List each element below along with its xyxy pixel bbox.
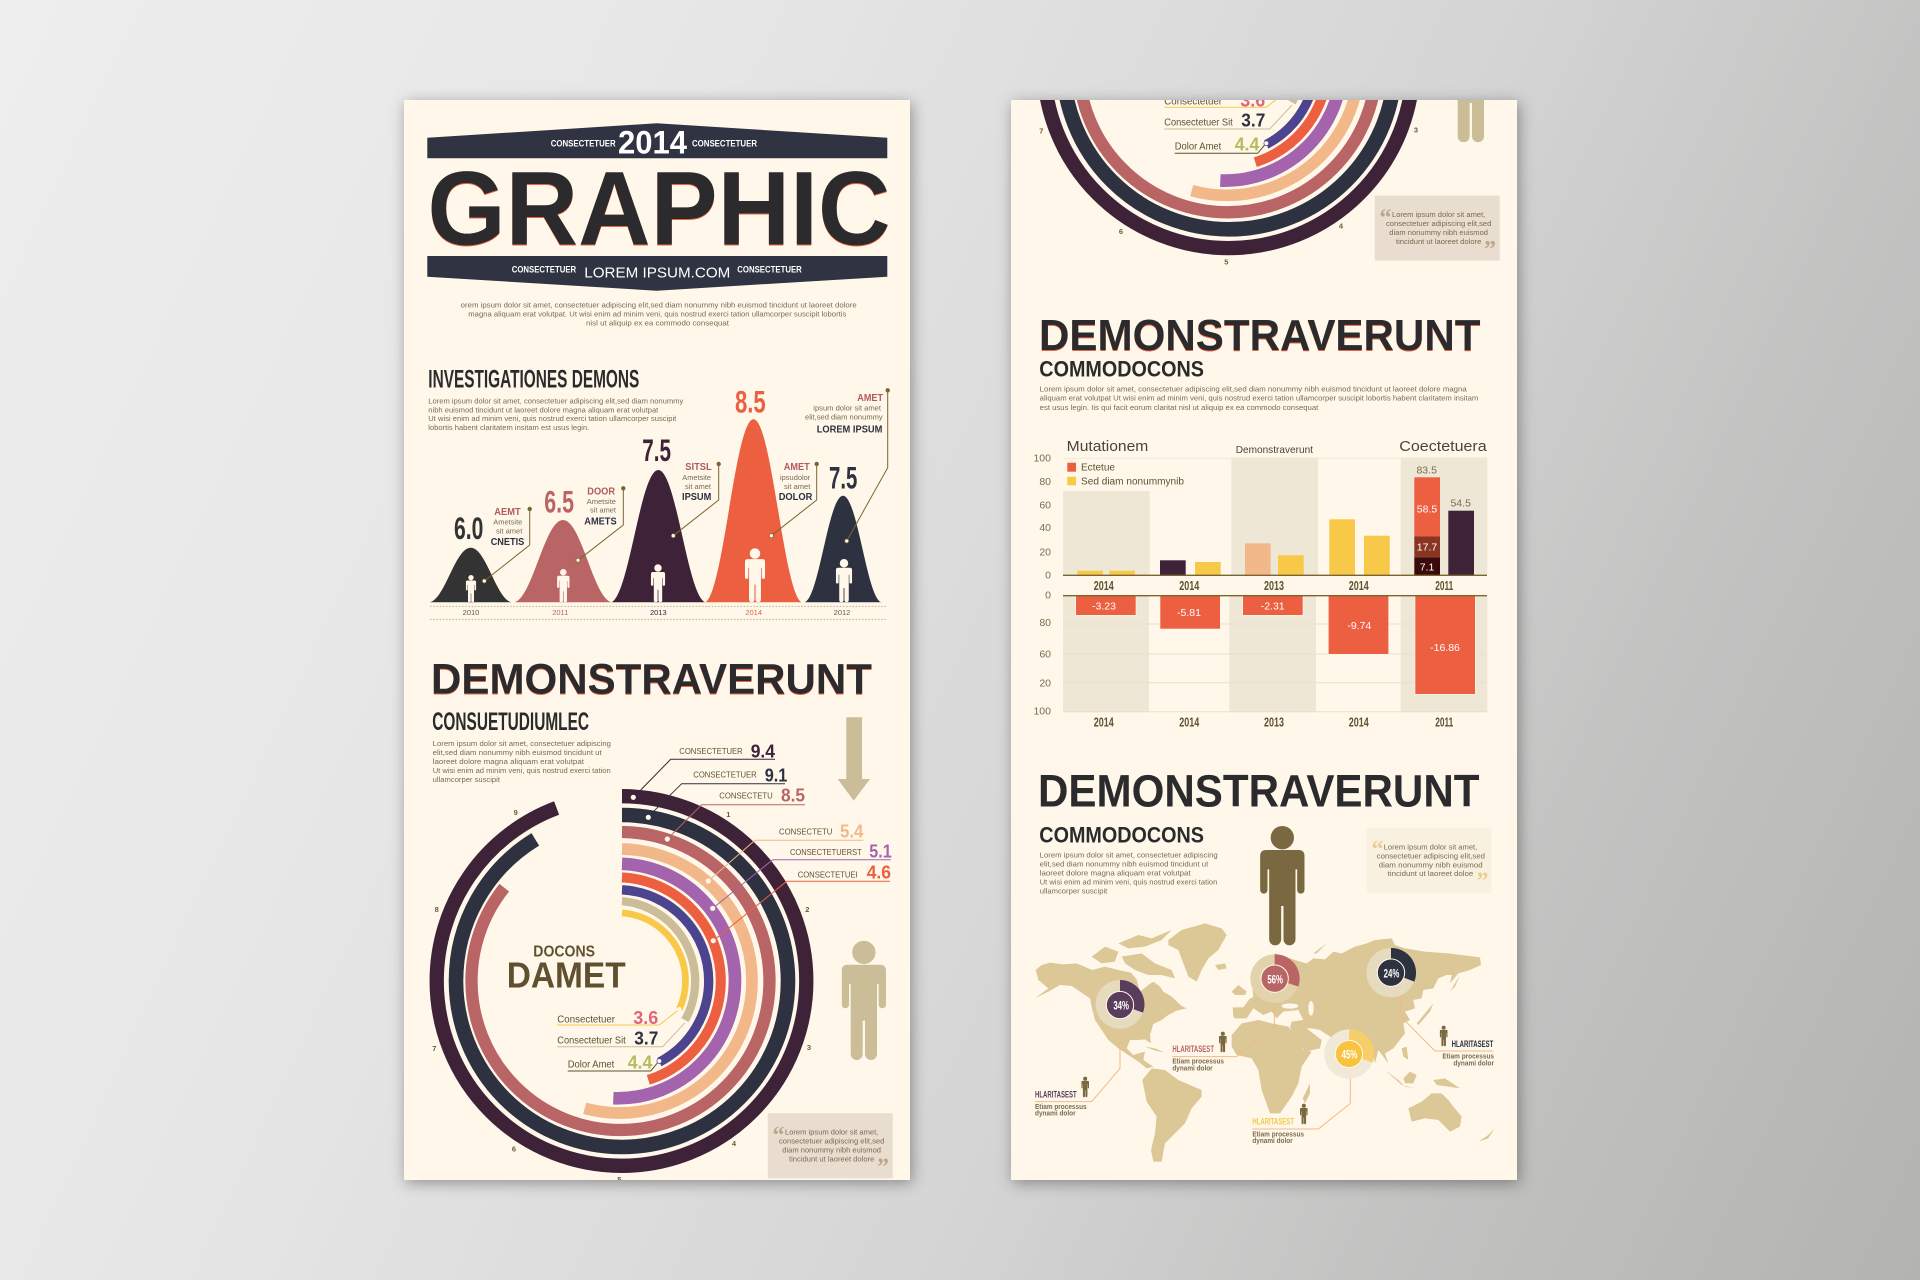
- callout: DOOR: [576, 485, 626, 562]
- title banner: top ribbon: CONSECTETUER: [551, 139, 616, 149]
- intro text: [461, 300, 857, 328]
- ring label 3.7: [557, 1023, 685, 1048]
- donut: 34%: [1096, 980, 1144, 1029]
- text block: Consuetudiumlec: laoreet dolore magna aliquam erat volutpat: [433, 757, 585, 766]
- continued quote box: [1375, 196, 1500, 263]
- upper years: 2014: [1179, 578, 1200, 593]
- lower bands: [1063, 596, 1487, 712]
- callout: AMET lorem ipsum: AMET: [857, 392, 884, 404]
- text block: Investigationes: Ut wisi enim ad minim veni, quis nostrud exerci tation ullamcorper suscipit: [428, 414, 677, 423]
- upper bars: [1077, 477, 1474, 575]
- text block: map section: Ut wisi enim ad minim veni, quis nostrud exerci tation: [1040, 878, 1217, 887]
- y axis lower: 100: [1033, 705, 1051, 717]
- infographic canvas: [404, 100, 1517, 1180]
- lower years: 2013: [1264, 715, 1284, 730]
- quote box: “: [772, 1123, 784, 1149]
- ring scale numbers: 5: [617, 1175, 621, 1184]
- continued ring label 3.6: Consectetuer: [1164, 96, 1222, 108]
- upper years: 2011: [1435, 578, 1453, 593]
- upper bar values: 7.1: [1420, 562, 1434, 574]
- map callout: Europe: HLARITASEST: [1172, 1044, 1214, 1054]
- ring 4.4: [622, 890, 709, 1062]
- ring 4.6: [622, 877, 721, 1080]
- map callout: India: [1252, 1078, 1350, 1145]
- lower bar values: -2.31: [1261, 600, 1285, 612]
- eurasia: [1233, 938, 1481, 1063]
- y axis upper: [1033, 453, 1051, 582]
- chart band backgrounds: [1063, 457, 1487, 575]
- upper bar values: 17.7: [1417, 542, 1437, 554]
- lower years: 2011: [1435, 715, 1453, 730]
- upper bar values: [1416, 464, 1471, 574]
- intro text: magna aliquam erat volutpat. Ut wisi enim ad minim veni, quis nostrud exerci tation ullamcorper suscipit lobortis: [468, 310, 846, 319]
- year axis: 2012: [834, 608, 850, 617]
- continued quote box: diam nonummy nibh euismod: [1389, 228, 1488, 237]
- bell 2010: 6.0: [454, 510, 483, 546]
- bell 2010: [430, 510, 512, 602]
- map callout: Russia: HLARITASEST: [1452, 1039, 1494, 1049]
- upper years: 2014: [1349, 578, 1369, 593]
- continued tan person: [1449, 23, 1493, 142]
- ring scale numbers: 4: [732, 1139, 737, 1148]
- y axis lower: [1033, 590, 1051, 717]
- upper years: 2014: [1094, 578, 1114, 593]
- ring label 5.4: [706, 821, 863, 884]
- icon: down arrow: [838, 717, 870, 801]
- ring label 3.6: 3.6: [633, 1008, 658, 1028]
- text block: Consuetudiumlec: ullamcorper suscipit: [433, 775, 501, 784]
- heading: Demonstraverunt map section: DEMONSTRAVERUNT: [1038, 766, 1480, 817]
- donut: 45%: [1324, 1029, 1374, 1079]
- lower years: 2014: [1094, 715, 1114, 730]
- panel: left page: [404, 100, 910, 1184]
- continued ring label 4.4: 4.4: [1235, 135, 1259, 155]
- callout: SITSL: [671, 461, 721, 538]
- quote box: consectetuer adipiscing elit,sed: [779, 1137, 884, 1146]
- callout: AMET ipsudolor: ipsudolor: [780, 473, 811, 482]
- subheading: Consuetudiumlec: CONSUETUDIUMLEC: [432, 708, 589, 736]
- right page shadow: [1011, 100, 1517, 1180]
- bell 2014: [706, 383, 802, 602]
- callout: DOOR: sit amet: [590, 506, 617, 515]
- map callout: Russia: Etiam processus: [1442, 1054, 1494, 1061]
- intro text: nisl ut aliquip ex ea commodo consequat: [586, 319, 730, 328]
- legend: [1067, 463, 1184, 487]
- column titles: Demonstraverunt: [1236, 444, 1313, 456]
- callout: AEMT: [482, 506, 532, 583]
- column titles: Coectetuera: [1399, 438, 1487, 455]
- upper bar values: 54.5: [1450, 498, 1471, 510]
- callout: DOOR: DOOR: [587, 485, 615, 497]
- ring label 5.4: 5.4: [840, 821, 863, 841]
- ring label 5.1: CONSECTETUERST: [790, 847, 862, 857]
- cuba and caribbean: [1145, 1047, 1165, 1053]
- ring 9.1: [456, 815, 788, 1147]
- callout: AMET ipsudolor: sit amet: [784, 482, 811, 491]
- continued ring scale numbers: 6: [1119, 227, 1123, 236]
- subheading: Commodocons map section: COMMODOCONS: [1039, 822, 1204, 847]
- ring label 9.1: CONSECTETUER: [693, 769, 757, 779]
- callout: DOOR: Ametsite: [587, 497, 616, 506]
- title banner: top ribbon: CONSECTETUER: [692, 139, 757, 149]
- ring 3.6: [622, 913, 686, 1009]
- donut: 24%: 24%: [1384, 966, 1400, 980]
- ring label 5.1: 5.1: [869, 841, 892, 861]
- quote box: map section: tincidunt ut laoreet doloe: [1388, 869, 1473, 878]
- quote box: Lorem ipsum dolor sit amet,: [785, 1128, 878, 1137]
- quote box: map section: “: [1372, 837, 1384, 863]
- greenland: [1168, 923, 1227, 982]
- donut: 56%: [1250, 954, 1300, 1003]
- y axis lower: 0: [1045, 590, 1051, 602]
- donut: 56%: 56%: [1267, 972, 1283, 986]
- icon: brown person: [1260, 826, 1304, 945]
- continued quote box: ”: [1484, 237, 1496, 263]
- ring label 9.4: CONSECTETUER: [679, 746, 743, 756]
- ring scale numbers: 3: [807, 1043, 811, 1052]
- lower years: 2014: [1179, 715, 1200, 730]
- title banner: top ribbon: 2014: [618, 124, 687, 160]
- continued quote box: Lorem ipsum dolor sit amet,: [1392, 210, 1485, 219]
- lower bar values: -9.74: [1347, 620, 1371, 632]
- page shadows: [404, 100, 910, 1180]
- ring label 3.6: Consectetuer: [557, 1013, 615, 1025]
- text block: Consuetudiumlec: Lorem ipsum dolor sit amet, consectetuer adipiscing: [433, 739, 611, 748]
- callout: AEMT: Ametsite: [493, 517, 522, 526]
- text block: map section: ullamcorper suscipit: [1040, 887, 1108, 896]
- upper bar values: 58.5: [1417, 504, 1437, 516]
- bell 2011: 6.5: [544, 483, 574, 519]
- ring label 8.5: CONSECTETU: [719, 790, 773, 800]
- quote box: [768, 1113, 893, 1180]
- title banner: bottom ribbon: LOREM IPSUM.COM: [584, 265, 730, 282]
- heading: Demonstraverunt chart section: DEMONSTRAVERUNT: [1039, 312, 1481, 360]
- ring label 8.5: [665, 785, 805, 842]
- ring 5.1: [613, 864, 735, 1098]
- title banner: bottom ribbon: [427, 256, 887, 291]
- ring label 4.4: 4.4: [628, 1052, 652, 1072]
- ring label 5.1: [710, 841, 892, 911]
- quote box: diam nonummy nibh euismod: [782, 1146, 881, 1155]
- callout: AEMT: AEMT: [494, 506, 521, 518]
- map callout: North America: Etiam processus: [1035, 1104, 1087, 1111]
- lower bar values: -16.86: [1430, 642, 1460, 654]
- bell chart: [430, 383, 881, 602]
- legend: Ectetue: [1081, 463, 1115, 474]
- callout: AMET lorem ipsum: ipsum dolor sit amet: [813, 404, 882, 413]
- y axis upper: 20: [1039, 547, 1051, 559]
- bell 2013: 7.5: [642, 432, 671, 468]
- title banner: bottom ribbon: CONSECTETUER: [737, 265, 802, 275]
- africa: [1232, 1020, 1312, 1113]
- continued ring scale numbers: 3: [1414, 125, 1418, 134]
- callout: DOOR: AMETS: [584, 515, 617, 527]
- madagascar: [1303, 1083, 1310, 1103]
- text block: map section: Lorem ipsum dolor sit amet, consectetuer adipiscing: [1040, 851, 1218, 860]
- ring label 5.4: CONSECTETU: [779, 827, 832, 837]
- map callout: Europe: Etiam processus: [1172, 1059, 1224, 1066]
- ring scale numbers: [432, 808, 811, 1184]
- y axis upper: 100: [1033, 453, 1051, 465]
- map callout: India: dynami dolor: [1252, 1138, 1293, 1145]
- ring 9.4: [437, 796, 806, 1166]
- continued quote box: consectetuer adipiscing elit,sed: [1386, 219, 1491, 228]
- continued ring label 4.4: [1175, 135, 1269, 155]
- map callout: Russia: [1401, 995, 1494, 1067]
- lower years: 2014: [1349, 715, 1369, 730]
- center label: Docons Damet: DOCONS: [533, 944, 595, 961]
- y axis upper: 0: [1045, 570, 1051, 582]
- continued ring scale numbers: [1039, 125, 1418, 266]
- text block: map section: [1040, 851, 1218, 896]
- lower bar values: [1092, 600, 1460, 654]
- south east asia islands: [1385, 1047, 1460, 1088]
- callout: AEMT: CNETIS: [491, 536, 524, 548]
- lower bar values: -3.23: [1092, 600, 1116, 612]
- callout: SITSL: SITSL: [685, 461, 712, 473]
- radial bar chart continued: [1039, 0, 1500, 266]
- center label: Docons Damet: DAMET: [507, 954, 626, 995]
- quote box: map section: ”: [1476, 868, 1488, 894]
- world map: [1035, 923, 1494, 1162]
- y axis lower: 20: [1039, 677, 1051, 689]
- title: GRAPHIC: GRAPHIC: [428, 150, 890, 268]
- subheading: Commodocons chart section: COMMODOCONS: [1039, 357, 1204, 382]
- map callout: Europe: [1172, 1003, 1274, 1072]
- map callout: North America: HLARITASEST: [1035, 1089, 1077, 1099]
- donut: 34%: 34%: [1113, 998, 1129, 1012]
- quote box: map section: Lorem ipsum dolor sit amet,: [1384, 842, 1477, 851]
- callout: AMET ipsudolor: DOLOR: [779, 491, 813, 503]
- continued ring label 3.7: 3.7: [1241, 111, 1265, 131]
- ring label 8.5: 8.5: [781, 785, 805, 805]
- ring label 9.4: [631, 741, 775, 800]
- text block: chart section: [1040, 385, 1478, 412]
- text block: Investigationes: [428, 396, 683, 432]
- bar chart: lower: [1033, 590, 1487, 730]
- callout: AMET ipsudolor: [769, 461, 819, 538]
- y axis upper: 40: [1039, 522, 1051, 534]
- bell 2012: 7.5: [829, 459, 857, 495]
- bell 2013: [612, 432, 705, 602]
- ring scale numbers: 2: [805, 905, 809, 914]
- text block: Consuetudiumlec: Ut wisi enim ad minim veni, quis nostrud exerci tation: [433, 766, 611, 775]
- bell 2011: [514, 483, 612, 602]
- text block: Investigationes: Lorem ipsum dolor sit amet, consectetuer adipiscing elit,sed diam nonummy: [428, 396, 683, 405]
- lower bars: [1076, 596, 1475, 694]
- continued ring scale numbers: 7: [1039, 126, 1043, 135]
- ring scale numbers: 6: [512, 1144, 516, 1154]
- text block: Investigationes: nibh euismod tincidunt ut laoreet dolore magna aliquam erat volutpat: [428, 405, 659, 414]
- text block: map section: laoreet dolore magna aliquam erat volutpat: [1040, 869, 1192, 878]
- ring scale numbers: 8: [435, 905, 439, 914]
- callout: SITSL: Ametsite: [682, 473, 711, 482]
- heading: Demonstraverunt: DEMONSTRAVERUNT: [431, 655, 872, 703]
- callout: AMET lorem ipsum: [805, 388, 890, 543]
- arctic islands: [1092, 930, 1175, 978]
- text block: map section: elit,sed diam nonummy nibh euismod tincidunt ut: [1040, 860, 1209, 869]
- callout: AMET lorem ipsum: elit,sed diam nonummy: [805, 412, 883, 421]
- y axis upper: 80: [1039, 476, 1051, 488]
- quote box: ”: [877, 1154, 889, 1180]
- ring 8.5: [471, 832, 770, 1130]
- ring label 9.1: 9.1: [765, 765, 787, 785]
- ring label 3.7: Consectetuer Sit: [557, 1034, 626, 1046]
- quote box: map section: [1367, 828, 1492, 894]
- quote box: tincidunt ut laoreet dolore: [789, 1155, 874, 1164]
- column titles: Mutationem: [1067, 438, 1148, 455]
- ring scale numbers: 1: [726, 810, 730, 819]
- ring label 4.6: CONSECTETUEI: [798, 869, 858, 879]
- ring label 4.4: Dolor Amet: [568, 1058, 614, 1070]
- title banner: top ribbon: [427, 123, 887, 160]
- callout: AEMT: sit amet: [496, 526, 523, 535]
- continued rings: [1044, 0, 1413, 248]
- bell 2014: 8.5: [735, 383, 766, 419]
- callout: SITSL: IPSUM: [682, 491, 712, 503]
- continued ring scale numbers: 4: [1339, 221, 1344, 230]
- radial bar chart: [437, 796, 806, 1166]
- map callout: North America: [1035, 1030, 1120, 1118]
- text block: chart section: Lorem ipsum dolor sit amet, consectetuer adipiscing elit,sed diam nonummy nibh euismod tincidunt ut laoreet dolore magna: [1040, 385, 1467, 394]
- upper years: [1094, 578, 1453, 593]
- text block: chart section: aliquam erat volutpat Ut wisi enim ad minim veni, quis nostrud exerci tation ullamcorper suscipit lobortis habent claritatem insitam: [1040, 394, 1478, 403]
- quote box: map section: diam nonummy nibh euismod: [1379, 860, 1483, 869]
- icon: tan person: [842, 941, 886, 1060]
- legend: Sed diam nonummynib: [1081, 476, 1184, 487]
- south america: [1142, 1068, 1202, 1162]
- map callout: India: HLARITASEST: [1252, 1117, 1294, 1127]
- continued ring label 3.6: [1164, 90, 1286, 110]
- year axis: [430, 606, 887, 619]
- donut: 45%: 45%: [1342, 1048, 1358, 1062]
- year axis: 2014: [745, 608, 762, 617]
- map callout: Russia: dynami dolor: [1453, 1060, 1494, 1067]
- intro text: orem ipsum dolor sit amet, consectetuer adipiscing elit,sed diam nonummy nibh euismod tincidunt ut laoreet dolore: [461, 300, 857, 309]
- new zealand: [1478, 1128, 1494, 1142]
- text block: Consuetudiumlec: [433, 739, 611, 784]
- ring 3.7: [622, 901, 695, 1020]
- panel: right page: [1011, 0, 1517, 1180]
- ring label 3.6: [557, 1007, 682, 1028]
- callout: AMET lorem ipsum: LOREM IPSUM: [817, 423, 883, 435]
- column titles: [1067, 438, 1487, 456]
- ring label 3.7: 3.7: [634, 1028, 658, 1048]
- continued quote box: tincidunt ut laoreet dolore: [1396, 237, 1481, 246]
- y axis upper: 60: [1039, 499, 1051, 511]
- continued ring scale numbers: 5: [1224, 257, 1228, 266]
- bell 2012: [805, 459, 881, 602]
- continued ring label 4.4: Dolor Amet: [1175, 141, 1221, 153]
- continued ring label 3.7: Consectetuer Sit: [1164, 117, 1233, 129]
- year axis: 2011: [552, 608, 568, 617]
- text block: Investigationes: lobortis habent claritatem insitam est usus legin.: [428, 423, 589, 432]
- text block: chart section: est usus legin. Iis qui facit eorum claritat nisl ut aliquip ex ea commodo consequat: [1040, 403, 1319, 412]
- ring scale numbers: 9: [514, 808, 518, 817]
- title banner: bottom ribbon: CONSECTETUER: [512, 265, 577, 275]
- upper years: 2013: [1264, 578, 1284, 593]
- donut: 24%: [1366, 948, 1416, 997]
- british isles and japan: [1232, 938, 1460, 1025]
- y axis lower: 60: [1039, 648, 1051, 660]
- y axis lower: 80: [1039, 617, 1051, 629]
- inland seas: [1282, 1001, 1314, 1016]
- map section in zoomed coordinates: [1035, 826, 1494, 1162]
- year axis: 2013: [650, 608, 667, 617]
- ring 5.4: [585, 849, 752, 1113]
- ring label 4.6: [711, 862, 891, 943]
- callout: SITSL: sit amet: [685, 482, 712, 491]
- quote box: map section: consectetuer adipiscing elit,sed: [1377, 851, 1485, 860]
- ring label 9.4: 9.4: [751, 741, 775, 761]
- ring label 4.6: 4.6: [867, 862, 891, 882]
- heading: Investigationes Demons: INVESTIGATIONES DEMONS: [428, 365, 639, 393]
- continued ring label 3.6: 3.6: [1240, 90, 1265, 110]
- map callout: Europe: dynami dolor: [1172, 1065, 1213, 1072]
- callout: AMET ipsudolor: AMET: [784, 461, 810, 473]
- map callout: North America: dynami dolor: [1035, 1111, 1076, 1118]
- map callout: India: Etiam processus: [1252, 1131, 1304, 1138]
- iceland: [1215, 963, 1227, 970]
- continued quote box: “: [1380, 205, 1392, 231]
- text block: Consuetudiumlec: elit,sed diam nonummy nibh euismod tincidunt ut: [433, 748, 603, 757]
- upper bar values: 83.5: [1416, 464, 1437, 476]
- ring scale numbers: 7: [432, 1044, 436, 1053]
- ring label 4.4: [568, 1052, 662, 1072]
- continued ring label 3.7: [1164, 105, 1292, 131]
- bar chart: upper: [1033, 438, 1487, 593]
- ring label 9.1: [646, 765, 787, 820]
- lower years: [1094, 715, 1453, 730]
- lower bar values: -5.81: [1177, 607, 1201, 619]
- year axis: 2010: [463, 608, 479, 617]
- australia: [1408, 1093, 1462, 1132]
- north america: [1035, 963, 1187, 1068]
